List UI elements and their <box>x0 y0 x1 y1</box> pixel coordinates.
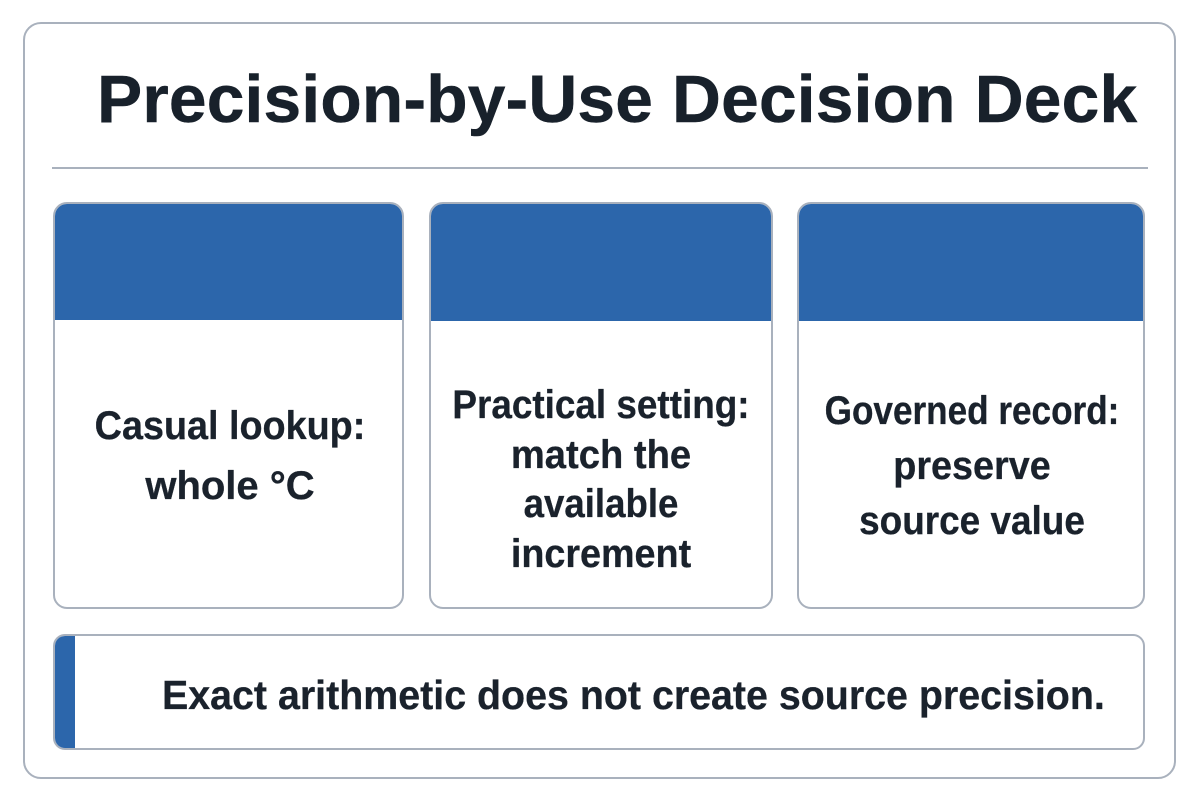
text: governed record: Governed record: <box>825 389 1119 433</box>
panel: practical setting <box>429 202 773 609</box>
text: practical setting <box>452 383 750 576</box>
callout text: Exact arithmetic does not create source precision. <box>162 672 1105 718</box>
text: governed record <box>825 389 1119 543</box>
text: governed record: source value <box>859 499 1085 543</box>
text: casual lookup: Casual lookup: <box>95 404 365 448</box>
title: Precision-by-Use Decision Deck <box>97 62 1137 137</box>
text: practical setting: increment <box>511 532 691 576</box>
text: governed record: preserve <box>893 444 1051 488</box>
header band: practical setting <box>429 202 773 321</box>
text: practical setting: match the <box>511 432 691 476</box>
callout accent bar <box>53 634 75 750</box>
panel: governed record <box>797 202 1145 609</box>
text: practical setting: available <box>524 482 678 526</box>
text: casual lookup: whole °C <box>145 464 315 508</box>
header band: casual lookup <box>53 202 404 320</box>
text: casual lookup <box>95 404 365 508</box>
text: practical setting: Practical setting: <box>452 383 750 427</box>
header band: governed record <box>797 202 1145 321</box>
callout <box>53 634 1145 750</box>
panel: casual lookup <box>53 202 404 609</box>
